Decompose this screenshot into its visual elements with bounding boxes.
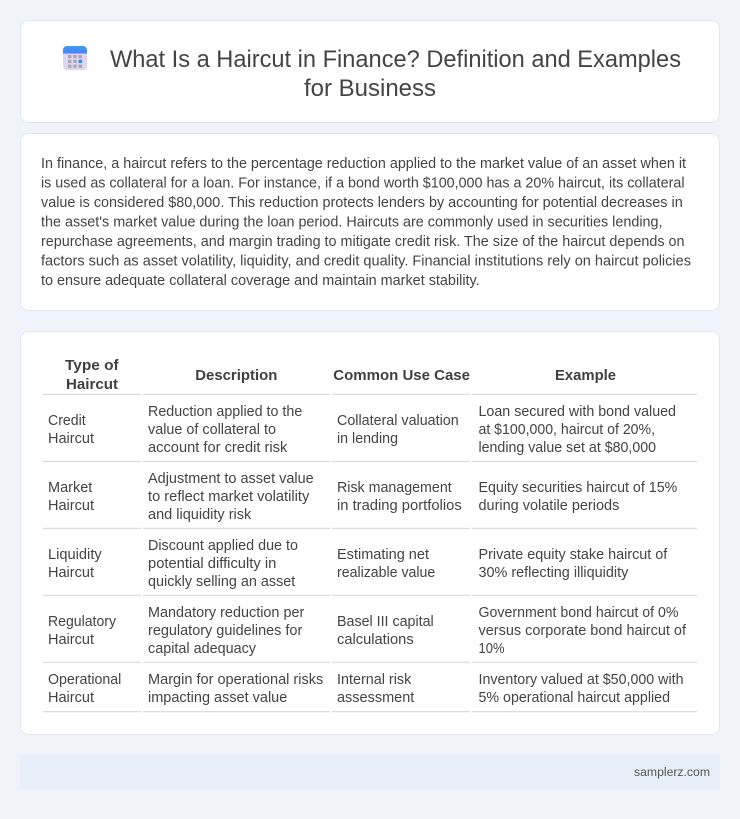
table row: regulatory haircut: versus corporate bond haircut of (478, 623, 687, 639)
table row: credit haircut: in lending (337, 431, 398, 447)
table row: liquidity haircut: Private equity stake haircut of (478, 547, 668, 563)
table row: regulatory haircut: calculations (337, 632, 414, 648)
table header row (43, 357, 697, 395)
table header row: Common Use Case (333, 367, 470, 384)
table row: market haircut: and liquidity risk (148, 507, 252, 523)
panel: haircut table (20, 332, 720, 734)
table row: market haircut: Risk management (337, 480, 452, 496)
table row: credit haircut: Collateral valuation (337, 413, 459, 429)
table row: liquidity haircut: quickly selling an asset (148, 574, 295, 590)
title (110, 46, 681, 102)
table row: market haircut: Haircut (48, 498, 94, 514)
table row: market haircut: to reflect market volatility (148, 489, 310, 505)
text block: definition: In finance, a haircut refers to the percentage reduction applied to the market value of an asset when it (41, 156, 686, 172)
table row: regulatory haircut (43, 605, 697, 663)
table row: operational haircut: assessment (337, 690, 414, 706)
title: What Is a Haircut in Finance? Definition and Examples (110, 46, 681, 73)
table row: credit haircut: at $100,000, haircut of 20%, (478, 422, 655, 438)
table row: credit haircut: Haircut (48, 431, 94, 447)
panel: definition paragraph (20, 134, 720, 310)
table row: regulatory haircut: 10% (478, 641, 505, 657)
table header row: Haircut (66, 376, 118, 393)
table row: credit haircut: lending value set at $80,000 (478, 440, 656, 456)
table row: operational haircut: Operational (48, 672, 121, 688)
text block: definition: the asset's market value during the loan period. Haircuts are commonly used in securities lending, (41, 214, 662, 230)
table row: liquidity haircut: Liquidity (48, 547, 102, 563)
table row: liquidity haircut (43, 538, 697, 596)
table row: operational haircut: Haircut (48, 690, 94, 706)
table row: operational haircut: Inventory valued at $50,000 with (478, 672, 684, 688)
table row: operational haircut: impacting asset value (148, 690, 287, 706)
table row: market haircut: in trading portfolios (337, 498, 462, 514)
table header row: Example (555, 367, 616, 384)
table row: liquidity haircut: realizable value (337, 565, 435, 581)
table row: credit haircut: value of collateral to (148, 422, 276, 438)
text block: definition: is used as collateral for a loan. For instance, if a bond worth $100,000 has a 20% haircut, its collateral (41, 176, 684, 192)
table row: regulatory haircut: Haircut (48, 632, 94, 648)
table row: operational haircut: Margin for operational risks (148, 672, 323, 688)
text block: definition: factors such as asset volatility, liquidity, and credit quality. Financial institutions rely on haircut policies (41, 254, 691, 270)
text block: definition: value is considered $80,000. This reduction protects lenders by accounting for potential decreases in (41, 195, 683, 211)
table row: liquidity haircut: Estimating net (337, 547, 429, 563)
table row: operational haircut (43, 672, 697, 712)
title: for Business (304, 75, 436, 102)
table row: regulatory haircut: regulatory guidelines for (148, 623, 302, 639)
footer: samplerz.com (634, 765, 710, 779)
table row: credit haircut (43, 404, 697, 462)
table row: market haircut: Market (48, 480, 92, 496)
table row: operational haircut: Internal risk (337, 672, 412, 688)
text block: definition: repurchase agreements, and margin trading to mitigate credit risk. The size of the haircut depends on (41, 234, 684, 250)
table row: market haircut: Adjustment to asset value (148, 471, 314, 487)
table header row: Type of (65, 357, 120, 374)
table row: operational haircut: 5% operational haircut applied (478, 690, 670, 706)
table row: regulatory haircut: capital adequacy (148, 641, 257, 657)
text block: definition: to ensure adequate collateral coverage and maintain market stability. (41, 273, 480, 289)
table row: credit haircut: account for credit risk (148, 440, 288, 456)
text block: definition (41, 156, 691, 289)
table row: market haircut (43, 471, 697, 529)
table row: regulatory haircut: Regulatory (48, 614, 117, 630)
icon: calendar (63, 46, 87, 70)
table row: regulatory haircut: Government bond haircut of 0% (478, 605, 679, 621)
footer (20, 755, 720, 789)
table row: regulatory haircut: Mandatory reduction per (148, 605, 304, 621)
table row: credit haircut: Loan secured with bond valued (478, 404, 676, 420)
table row: credit haircut: Reduction applied to the (148, 404, 302, 420)
table row: liquidity haircut: Haircut (48, 565, 94, 581)
panel: header (20, 20, 720, 122)
table row: liquidity haircut: 30% reflecting illiquidity (478, 565, 629, 581)
table row: regulatory haircut: Basel III capital (337, 614, 434, 630)
table row: credit haircut: Credit (48, 413, 86, 429)
table row: market haircut: Equity securities haircut of 15% (478, 480, 677, 496)
table row: liquidity haircut: Discount applied due to (148, 538, 298, 554)
table row: liquidity haircut: potential difficulty in (148, 556, 276, 572)
table header row: Description (195, 367, 277, 384)
table row: market haircut: during volatile periods (478, 498, 619, 514)
